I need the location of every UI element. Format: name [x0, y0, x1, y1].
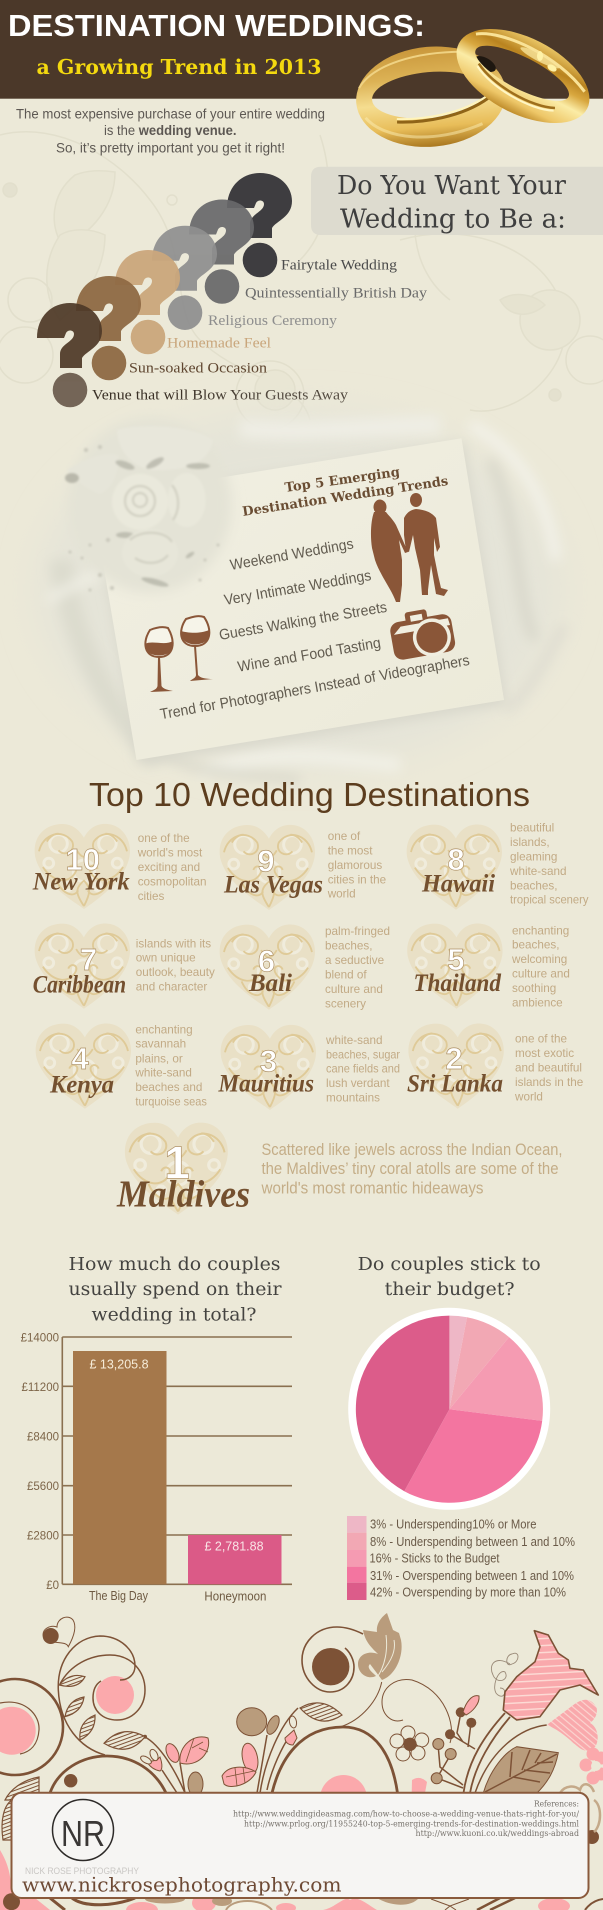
destination 4: Kenya: beaches and: [135, 1081, 202, 1094]
flower: [390, 1726, 429, 1761]
destination 9: Las Vegas: one of: [328, 830, 361, 843]
destination 5: Thailand: enchanting: [512, 924, 569, 937]
wedding type list: Homemade Feel: [167, 335, 271, 351]
bar chart: wedding spend: [21, 1332, 292, 1604]
heading: budget question: their budget?: [385, 1280, 515, 1300]
icon: wine glasses: [145, 616, 213, 692]
destination 9: Las Vegas: 9: [257, 844, 275, 879]
destination 9: Las Vegas: glamorous: [328, 859, 382, 872]
icon: gold wedding rings: [352, 9, 603, 153]
logo: Nick Rose Photography: NICK ROSE PHOTOGRAPHY: [25, 1866, 139, 1876]
floral decoration: [0, 1613, 603, 1910]
destination 6: Bali: scenery: [325, 997, 366, 1010]
destination 10: New York: cities: [138, 890, 164, 903]
heading: spend question: How much do couples: [68, 1255, 281, 1275]
destination 6: Bali: a seductive: [325, 954, 384, 967]
wedding type list: [92, 257, 428, 403]
heading: spend question: wedding in total?: [92, 1306, 256, 1326]
wedding type list: Religious Ceremony: [208, 313, 338, 329]
destination 4: Kenya: savannah: [135, 1038, 186, 1051]
bar: the big day: £ 13,205.8: [89, 1357, 149, 1371]
destination 8: Hawaii: [407, 822, 589, 910]
card trends list: Wine and Food Tasting: [236, 634, 382, 676]
destination 2: Sri Lanka: most exotic: [515, 1047, 574, 1060]
destination 8: Hawaii: tropical scenery: [510, 894, 589, 907]
destination 9: Las Vegas: world: [327, 888, 356, 901]
pie legend: 42% - Overspending by more than 10%: [370, 1586, 566, 1600]
destination 4: Kenya: turquoise seas: [135, 1096, 207, 1109]
destination 9: Las Vegas: cities in the: [328, 873, 386, 886]
heart outline and dot: [43, 1617, 75, 1647]
destination 10: New York: 10: [65, 842, 100, 877]
small pink flower: [580, 1748, 603, 1784]
destination 3: Mauritius: 3: [260, 1044, 277, 1079]
bar chart: wedding spend: Honeymoon: [204, 1590, 266, 1604]
destination 10: New York: New York: [32, 868, 130, 895]
destination 6: Bali: 6: [258, 944, 275, 979]
destination 4: Kenya: [36, 1023, 207, 1109]
icon: brown question mark: [76, 276, 141, 380]
pie legend: 31% - Overspending between 1 and 10%: [370, 1569, 574, 1583]
destination 9: Las Vegas: the most: [328, 845, 373, 858]
wedding type list: Venue that will Blow Your Guests Away: [92, 387, 349, 403]
destination 2: Sri Lanka: one of the: [515, 1033, 567, 1046]
destination 1: Maldives: Maldives: [116, 1174, 250, 1216]
destination 8: Hawaii: gleaming: [510, 851, 557, 864]
references: References:: [534, 1800, 579, 1809]
bouquet: [65, 417, 232, 593]
pie legend: 16% - Sticks to the Budget: [370, 1552, 500, 1566]
card trends list: [159, 535, 471, 723]
destination 8: Hawaii: beautiful: [510, 822, 554, 835]
destination 2: Sri Lanka: and beautiful: [515, 1061, 582, 1074]
destination 10: New York: exciting and: [138, 861, 200, 874]
intro text: [16, 106, 325, 155]
panel: footer: [12, 1793, 588, 1898]
destination 2: Sri Lanka: 2: [445, 1041, 463, 1076]
panel: do you want heading: Wedding to Be a:: [340, 204, 566, 234]
logo: Nick Rose Photography: [25, 1800, 139, 1876]
heading: top 10 destinations: Top 10 Wedding Destinations: [89, 776, 530, 813]
destination 4: Kenya: plains, or: [135, 1052, 183, 1065]
icon: camera: [387, 605, 457, 663]
destination 6: Bali: beaches,: [325, 939, 372, 952]
destination 10: New York: cosmopolitan: [138, 876, 207, 889]
bar chart: wedding spend: £2800: [27, 1530, 59, 1542]
destination 4: Kenya: white-sand: [134, 1067, 192, 1080]
tan feather and leaves: [188, 1613, 558, 1796]
wedding type list: Fairytale Wedding: [281, 257, 398, 273]
destination 7: Caribbean: Caribbean: [33, 972, 126, 999]
references: http://www.prlog.org/11955240-top-5-emerging-trends-for-destination-weddings.html: [244, 1820, 579, 1829]
destination 5: Thailand: ambience: [512, 996, 563, 1009]
card trends list: Guests Walking the Streets: [218, 599, 388, 644]
panel: do you want heading: Do You Want Your: [337, 171, 567, 201]
destination 8: Hawaii: 8: [447, 842, 465, 877]
pie legend: 8% - Underspending between 1 and 10%: [370, 1535, 575, 1549]
destination 2: Sri Lanka: world: [514, 1090, 543, 1103]
pink filled shapes: [0, 1676, 367, 1822]
destination 8: Hawaii: beaches,: [510, 879, 557, 892]
bar: honeymoon: £ 2,781.88: [204, 1540, 264, 1554]
destination 6: Bali: palm-fringed: [325, 925, 390, 938]
heading: spend question: usually spend on their: [68, 1280, 282, 1300]
destination 6: Bali: [220, 925, 390, 1010]
destination 6: Bali: Bali: [248, 970, 292, 997]
pie chart: budget: [348, 1308, 550, 1510]
destination 7: Caribbean: 7: [80, 942, 97, 977]
destination 6: Bali: blend of: [325, 968, 367, 981]
icon: couple silhouette: [371, 493, 448, 602]
header band: [0, 0, 603, 99]
destination 8: Hawaii: Hawaii: [421, 871, 495, 898]
logo: Nick Rose Photography: NR: [61, 1813, 105, 1854]
destination 4: Kenya: 4: [71, 1041, 89, 1076]
destination 7: Caribbean: own unique: [136, 952, 196, 965]
destination 5: Thailand: Thailand: [414, 970, 501, 997]
intro text: So, it’s pretty important you get it right!: [56, 139, 285, 155]
destination 2: Sri Lanka: [407, 1024, 583, 1109]
wedding type list: Sun-soaked Occasion: [129, 360, 268, 376]
bar chart: wedding spend: £11200: [21, 1382, 59, 1394]
card title: Top 5 Emerging: [284, 465, 401, 496]
website url: www.nickrosephotography.com: [22, 1873, 342, 1897]
wedding type list: Quintessentially British Day: [245, 285, 428, 301]
bar: honeymoon: [188, 1535, 282, 1584]
destination 2: Sri Lanka: islands in the: [515, 1076, 583, 1089]
subtitle: a Growing Trend in 2013: [36, 55, 322, 79]
big striped tulip: [503, 1631, 598, 1720]
icon: dark question mark: [227, 173, 292, 277]
icon: tan question mark: [115, 250, 180, 354]
card trends list: Trend for Photographers Instead of Videographers: [159, 652, 471, 723]
destination 3: Mauritius: mountains: [326, 1092, 380, 1105]
destination 3: Mauritius: [218, 1025, 400, 1110]
destination 3: Mauritius: cane fields and: [326, 1063, 400, 1076]
references: http://www.weddingideasmag.com/how-to-choose-a-wedding-venue-thats-right-for-you/: [233, 1810, 579, 1819]
destination 3: Mauritius: lush verdant: [326, 1077, 390, 1090]
destination 5: Thailand: [407, 924, 570, 1009]
destination 2: Sri Lanka: Sri Lanka: [407, 1071, 503, 1098]
icon: grey question mark: [189, 200, 254, 304]
destination 6: Bali: culture and: [325, 983, 383, 996]
destination 4: Kenya: Kenya: [49, 1072, 114, 1099]
icon: dark brown question mark: [37, 303, 102, 407]
pie legend: [347, 1516, 575, 1600]
bar chart: wedding spend: The Big Day: [89, 1589, 149, 1603]
intro text: is the wedding venue.: [104, 122, 236, 138]
destination 1: Maldives: the Maldives’ tiny coral atolls are some of the: [262, 1159, 558, 1178]
destination 7: Caribbean: [33, 924, 215, 1009]
destination 5: Thailand: beaches,: [512, 939, 559, 952]
heading: spend question: [68, 1255, 282, 1326]
striped heart: [547, 1700, 598, 1751]
title: DESTINATION WEDDINGS:: [8, 8, 425, 43]
destination 3: Mauritius: Mauritius: [218, 1071, 314, 1098]
destination 9: Las Vegas: Las Vegas: [223, 872, 323, 899]
bar chart: wedding spend: £14000: [21, 1332, 59, 1344]
destination 1: Maldives: Scattered like jewels across the Indian Ocean,: [262, 1140, 562, 1159]
destination 10: New York: one of the: [138, 832, 190, 845]
bar chart: wedding spend: £0: [46, 1580, 59, 1592]
destination 9: Las Vegas: [220, 825, 386, 910]
pie legend: 3% - Underspending10% or More: [370, 1517, 537, 1531]
destination 8: Hawaii: white-sand: [509, 865, 567, 878]
icon: light grey question mark: [152, 226, 217, 330]
destination 3: Mauritius: beaches, sugar: [326, 1048, 400, 1061]
destination 4: Kenya: enchanting: [135, 1023, 193, 1036]
card trends list: Very Intimate Weddings: [223, 567, 373, 609]
panel: do you want heading: [311, 167, 603, 235]
heading: budget question: [358, 1255, 541, 1300]
stems and swirls: [0, 1627, 547, 1793]
photo: satin background with bouquet and card: [38, 412, 565, 780]
destination 7: Caribbean: and character: [136, 981, 207, 994]
heading: budget question: Do couples stick to: [358, 1255, 541, 1275]
destination 3: Mauritius: white-sand: [325, 1034, 383, 1047]
card title: Destination Wedding Trends: [241, 474, 449, 520]
bar: the big day: [73, 1351, 166, 1584]
destination 7: Caribbean: outlook, beauty: [136, 966, 215, 979]
destination 5: Thailand: soothing: [512, 982, 556, 995]
destination 1: Maldives: 1: [164, 1136, 190, 1188]
references: [233, 1800, 579, 1838]
intro text: The most expensive purchase of your entire wedding: [16, 106, 325, 122]
bar chart: wedding spend: £8400: [27, 1432, 59, 1444]
destination 7: Caribbean: islands with its: [136, 937, 211, 950]
card trends list: Weekend Weddings: [229, 535, 355, 574]
destination 10: New York: [32, 824, 207, 909]
bottom floral strip: [0, 1850, 603, 1910]
references: http://www.kuoni.co.uk/weddings-abroad: [416, 1829, 579, 1838]
destination 5: Thailand: 5: [447, 942, 465, 977]
destination 5: Thailand: culture and: [512, 967, 570, 980]
destination 1: Maldives: [116, 1123, 562, 1216]
card: [92, 438, 504, 760]
destination 10: New York: world's most: [137, 847, 203, 860]
destination 8: Hawaii: islands,: [510, 836, 550, 849]
bar chart: wedding spend: £5600: [27, 1481, 59, 1493]
destination 5: Thailand: welcoming: [511, 953, 567, 966]
striped leaves: [2, 1675, 342, 1840]
pink leaves and tulips: [147, 1696, 479, 1793]
destination 1: Maldives: world's most romantic hideaways: [261, 1178, 484, 1197]
